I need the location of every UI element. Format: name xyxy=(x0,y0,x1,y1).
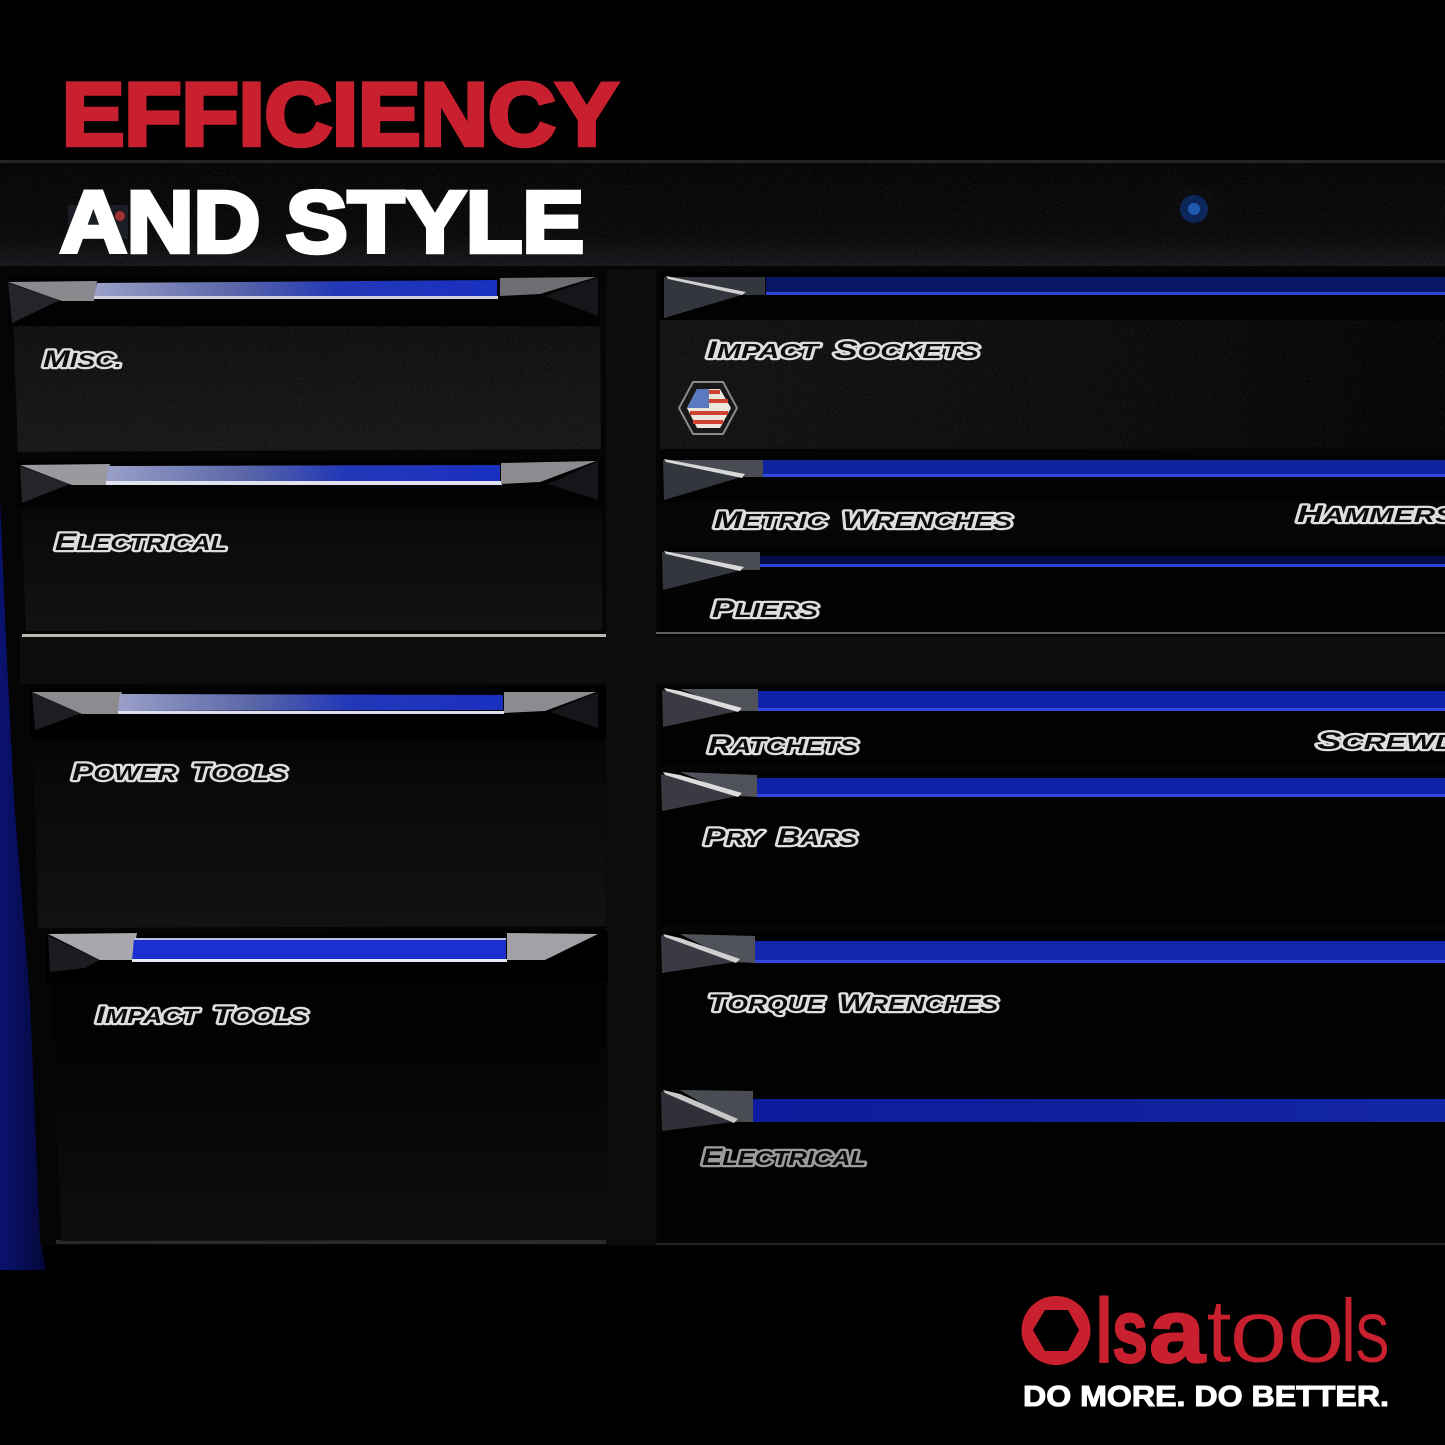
label: pry bars: P RY B ARS xyxy=(704,824,858,851)
logo: olsatools xyxy=(1022,1282,1390,1413)
label: torque wrenches: TORQUE W RENCHES xyxy=(708,990,999,1017)
panel: drawer impact tools xyxy=(46,930,608,1241)
handle: misc xyxy=(8,277,598,323)
side panel: blue edge xyxy=(0,500,46,1270)
label: impact sockets: IMPACT S OCKETS xyxy=(707,337,980,364)
label: pliers: P LIERS xyxy=(712,596,819,623)
wordmark: tools: s xyxy=(1355,1282,1390,1382)
label: power tools: P OWER TOOLS xyxy=(72,759,288,786)
label: ratchets: R ATCHETS xyxy=(708,732,859,759)
panel: drawer metric wrenches xyxy=(660,456,1445,546)
wordmark: lsa: l xyxy=(1096,1282,1112,1382)
lock: top drawer key xyxy=(1169,185,1223,239)
wordmark: tools: t xyxy=(1206,1282,1232,1382)
handle: power tools xyxy=(32,692,598,730)
handle: torque wrenches xyxy=(661,934,1445,973)
tagline: DO MORE. DO BETTER. xyxy=(1023,1381,1389,1413)
wordmark: lsa xyxy=(1096,1282,1206,1382)
handle: electrical right xyxy=(661,1090,1445,1131)
handle: pry bars xyxy=(661,772,1445,811)
panel: drawer impact sockets xyxy=(660,272,1445,449)
label: screwdrivers: S CREWD xyxy=(1317,728,1445,755)
label: electrical right: ELECTRICAL xyxy=(702,1144,866,1171)
wordmark: tools: o xyxy=(1286,1282,1345,1382)
handle: impact tools xyxy=(48,933,598,972)
label: electrical left: E LECTRICAL xyxy=(55,529,227,556)
label: misc: M ISC. xyxy=(43,346,122,373)
wordmark: tools: l xyxy=(1340,1282,1357,1382)
heading: efficiency: EFFICIENCY xyxy=(62,64,618,164)
icon: hex socket O xyxy=(1022,1296,1091,1365)
panel: drawer misc xyxy=(8,276,601,452)
handle: pliers xyxy=(662,551,1445,590)
panel: drawer torque wrenches xyxy=(660,932,1445,1087)
handle: electrical left xyxy=(20,461,598,503)
label: hammers: H AMMERS xyxy=(1297,501,1445,528)
handle: metric wrenches xyxy=(663,459,1445,500)
panel: drawer pliers xyxy=(660,548,1445,632)
label: metric wrenches: M ETRIC W RENCHES xyxy=(714,507,1013,534)
panel: drawer electrical right xyxy=(660,1088,1445,1240)
wordmark: tools: o xyxy=(1229,1282,1288,1382)
panel: drawer power tools xyxy=(30,686,606,928)
wordmark: lsa: s xyxy=(1112,1282,1148,1382)
panel: drawer pry bars xyxy=(660,770,1445,926)
cabinet body xyxy=(0,160,1445,1246)
handle: impact sockets xyxy=(664,276,1445,318)
panel: drawer electrical left xyxy=(18,460,602,631)
wordmark: tools xyxy=(1206,1282,1390,1382)
wordmark: lsa: a xyxy=(1149,1282,1206,1382)
texture: grain on upper cabinet xyxy=(0,162,1445,450)
label: impact tools: IMPACT TOOLS xyxy=(96,1002,309,1029)
handle: ratchets xyxy=(662,688,1445,727)
panel: drawer ratchets xyxy=(660,686,1445,766)
heading: and style: AND STYLE xyxy=(60,174,584,271)
icon: american flag hexagon xyxy=(679,382,737,434)
